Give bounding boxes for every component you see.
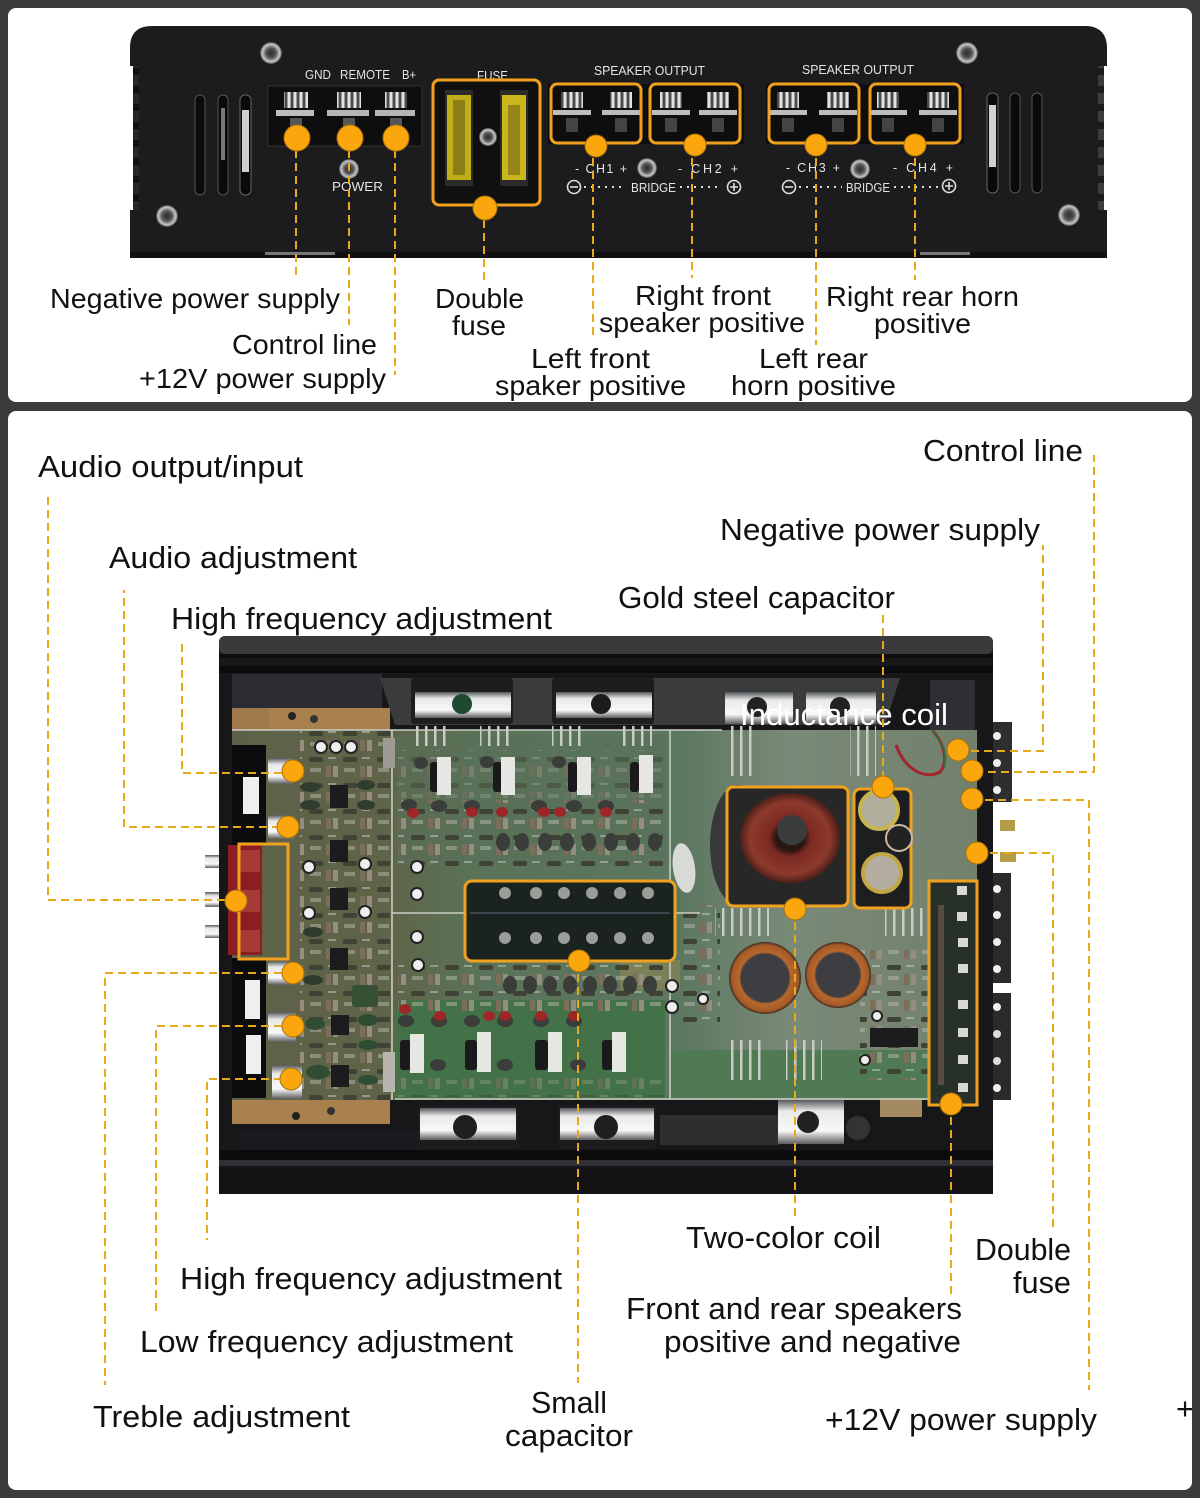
highlight: double fuse module	[929, 881, 977, 1105]
labels: terminal functions: speaker positive	[599, 307, 805, 338]
large copper capacitors	[670, 785, 871, 1014]
circuit board	[232, 708, 977, 1124]
labels: component names: Two-color coil	[686, 1220, 881, 1255]
device print labels: - CH1 +	[575, 162, 627, 176]
highlight boxes: speaker terminals	[551, 84, 960, 143]
labels: terminal functions: Right rear horn	[826, 281, 1019, 312]
device print labels: REMOTE	[340, 68, 390, 82]
power terminal block	[268, 86, 422, 146]
device print labels: - CH4 +	[893, 161, 953, 175]
labels: component names: +	[1176, 1391, 1194, 1426]
chips and small capacitors	[300, 738, 918, 1092]
device print labels: FUSE	[477, 69, 508, 83]
labels: component names: Treble adjustment	[93, 1399, 350, 1434]
labels: terminal functions: Control line	[232, 329, 377, 360]
highlight: gold steel capacitors	[854, 789, 912, 908]
right side connector blocks	[993, 722, 1016, 1100]
labels: terminal functions: spaker positive	[495, 370, 686, 401]
labels: component names: Control line	[923, 433, 1083, 468]
highlight: treble and bass control	[239, 844, 288, 959]
labels: component names: Audio output/input	[38, 449, 303, 484]
red and green supply wires	[896, 730, 945, 775]
labels: terminal functions: +12V power supply	[139, 363, 386, 394]
photo: amplifier end plate	[130, 26, 1107, 258]
device print labels: - CH3 +	[786, 161, 840, 175]
labels: terminal functions: Left front	[531, 343, 650, 374]
clamps: output transistor brackets	[411, 678, 925, 1149]
labels: component names: Audio adjustment	[109, 540, 357, 575]
device print labels: BRIDGE	[631, 181, 676, 195]
labels: component names: Small	[531, 1385, 607, 1420]
device print labels: BRIDGE	[846, 181, 890, 195]
labels: terminal functions: Right front	[635, 280, 771, 311]
labels: terminal functions: positive	[874, 308, 971, 339]
device print labels: B+	[402, 68, 416, 82]
photo: amplifier housing	[205, 636, 993, 1194]
labels: component names: Front and rear speakers	[626, 1291, 962, 1326]
highlight: front and rear speaker transistors	[465, 881, 675, 961]
device print labels: SPEAKER OUTPUT	[802, 63, 914, 77]
marker dots	[225, 739, 988, 1115]
marker dots	[284, 125, 926, 220]
overlay label: inductance coil: Inductance coil	[740, 697, 948, 732]
power resistors and transistors	[398, 755, 662, 1073]
device print labels: - CH2 +	[678, 162, 738, 176]
panel: amplifier internals	[8, 411, 1194, 1490]
speaker terminal blocks	[548, 84, 964, 144]
device print labels: POWER	[332, 180, 383, 194]
labels: terminal functions: Double	[435, 283, 524, 314]
labels: component names: High frequency adjustment	[180, 1261, 562, 1296]
panel: amplifier terminal side	[8, 8, 1192, 402]
labels: terminal functions: horn positive	[731, 370, 896, 401]
labels: component names: Gold steel capacitor	[618, 580, 895, 615]
highlight: inductor coil	[727, 787, 848, 906]
device print labels: GND	[305, 68, 331, 82]
icon: panel screws	[156, 42, 1080, 227]
labels: component names: positive and negative	[664, 1324, 961, 1359]
labels: component names	[38, 433, 1194, 1453]
labels: terminal functions: Left rear	[759, 343, 868, 374]
leader lines: terminals to labels	[296, 150, 915, 375]
labels: terminal functions	[50, 280, 1019, 401]
labels: component names: Double	[975, 1232, 1071, 1267]
device print labels: SPEAKER OUTPUT	[594, 64, 705, 78]
labels: component names: Low frequency adjustment	[140, 1324, 513, 1359]
labels: terminal functions: Negative power supply	[50, 283, 340, 314]
labels: terminal functions: fuse	[452, 310, 506, 341]
labels: component names: Negative power supply	[720, 512, 1041, 547]
labels: component names: fuse	[1013, 1265, 1071, 1300]
double fuse	[433, 80, 540, 205]
device print labels	[305, 63, 956, 195]
leader lines: components to labels	[48, 455, 1094, 1390]
labels: component names: +12V power supply	[825, 1402, 1098, 1437]
labels: component names: capacitor	[505, 1418, 633, 1453]
labels: component names: High frequency adjustment	[171, 601, 552, 636]
input controls: pots and chrome sockets	[228, 745, 302, 1099]
